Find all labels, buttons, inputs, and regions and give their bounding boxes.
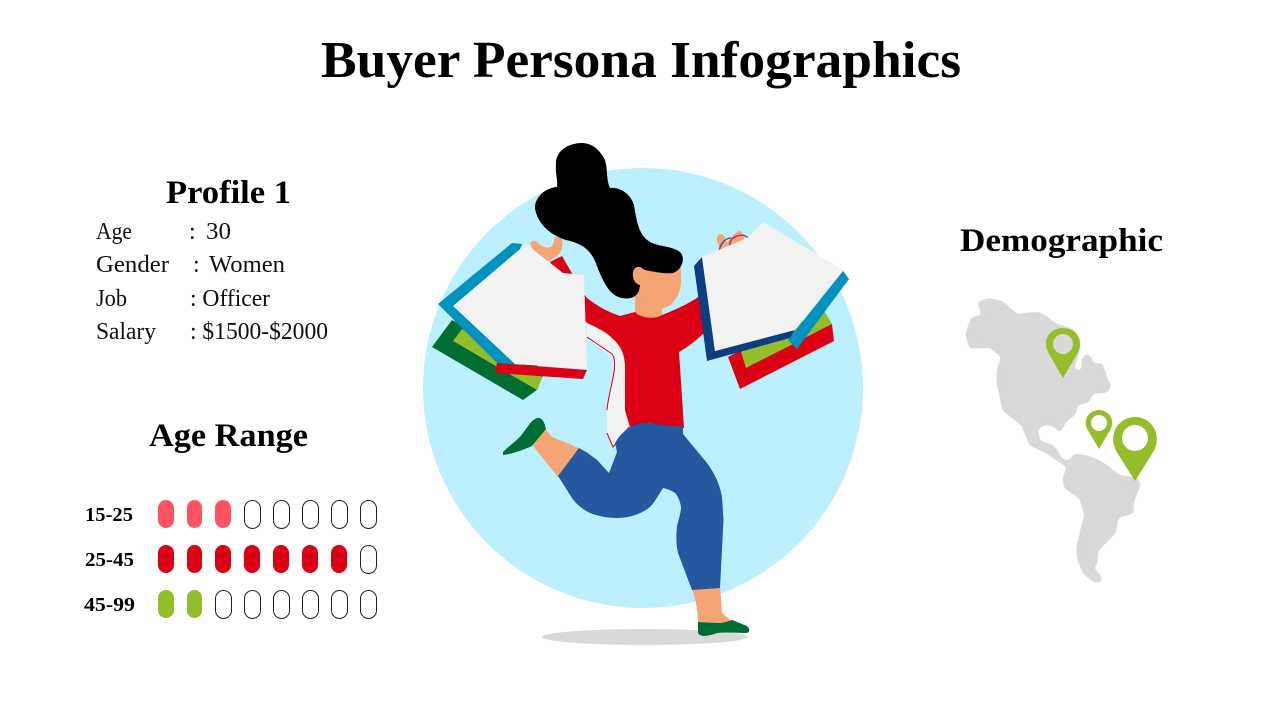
- age row: 45-99: 45-99: [84, 594, 135, 616]
- age row: 25-45: [85, 545, 376, 574]
- profile row: gender: Gender: [96, 252, 169, 278]
- panel: demographic: [960, 223, 1163, 583]
- profile row: salary: Salary: [96, 319, 156, 345]
- title: Buyer Persona Infographics: [321, 32, 961, 89]
- left arm: [550, 256, 575, 285]
- profile row: salary: : $1500-$2000: [190, 319, 328, 345]
- standing shoe: [698, 620, 749, 636]
- age row: 15-25: [85, 500, 376, 528]
- map pin: caribbean: [1086, 410, 1112, 449]
- lime bag panel: [741, 312, 832, 368]
- demographic heading: Demographic: [960, 223, 1163, 259]
- profile row: gender: [96, 252, 285, 278]
- profile row: age: :: [189, 219, 196, 245]
- age row: 15-25: 15-25: [85, 504, 133, 526]
- scarf red trim: [587, 337, 629, 447]
- age row: 45-99: [84, 590, 376, 618]
- dark green bag: [432, 320, 545, 400]
- left shopping bags: [432, 243, 587, 400]
- profile heading: Profile 1: [166, 175, 291, 211]
- profile row: job: Job: [96, 286, 127, 312]
- age range heading: Age Range: [149, 418, 308, 454]
- profile row: salary: [96, 319, 328, 345]
- background circle: [423, 168, 863, 608]
- left hand: [530, 237, 562, 262]
- face: [640, 262, 681, 309]
- panel: age range: [84, 418, 376, 618]
- profile row: job: [96, 286, 270, 312]
- red bag base: [495, 363, 587, 379]
- raised shoe: [503, 418, 546, 455]
- ground shadow: [542, 629, 748, 645]
- panel: profile: [96, 175, 328, 345]
- right shopping bags: [694, 222, 849, 389]
- neck: [635, 290, 662, 320]
- white bag front: [453, 244, 587, 369]
- raised leg skin: [533, 429, 581, 477]
- standing leg skin: [692, 586, 733, 624]
- hair: [535, 143, 683, 298]
- blue bag side: [438, 243, 522, 365]
- profile row: age: Age: [96, 219, 132, 245]
- profile row: gender: :: [193, 252, 200, 278]
- white bag front: [702, 222, 843, 351]
- lime bag panel: [453, 329, 542, 390]
- red bag: [728, 324, 834, 389]
- illustration: shopper: [432, 143, 849, 636]
- map pin: north america: [1046, 328, 1080, 378]
- profile row: job: : Officer: [190, 286, 270, 312]
- right hand with bag straps: [717, 231, 749, 256]
- torso: [570, 275, 705, 428]
- profile row: age: 30: [206, 219, 231, 245]
- ear: [633, 267, 646, 285]
- pants: [558, 423, 724, 590]
- age row: 25-45: 25-45: [85, 549, 134, 571]
- scarf: [587, 323, 629, 447]
- map pin: brazil: [1113, 417, 1157, 481]
- profile row: gender: Women: [209, 252, 285, 278]
- profile row: age: [96, 219, 231, 245]
- navy bag side: [694, 257, 795, 361]
- blue bag side: [788, 271, 849, 349]
- map: americas: [966, 299, 1140, 583]
